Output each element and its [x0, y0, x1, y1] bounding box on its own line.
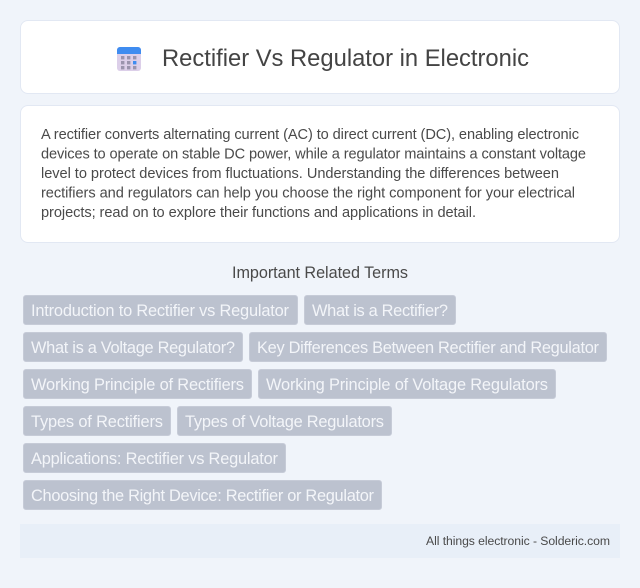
tag: [23, 332, 243, 362]
tag: Introduction to Rectifier vs Regulator: [31, 302, 290, 320]
tag: [249, 332, 607, 362]
footer text: All things electronic - Solderic.com: [426, 534, 610, 548]
tag list: [23, 295, 607, 510]
tag: [23, 295, 298, 325]
tag: Applications: Rectifier vs Regulator: [31, 450, 279, 468]
intro text panel: [20, 105, 620, 243]
tag: What is a Voltage Regulator?: [31, 339, 235, 357]
intro paragraph: projects; read on to explore their functions and applications in detail.: [41, 205, 476, 221]
tag: Choosing the Right Device: Rectifier or Regulator: [31, 487, 375, 505]
tag: [304, 295, 456, 325]
tag: [258, 369, 556, 399]
title: Rectifier Vs Regulator in Electronic: [162, 45, 529, 72]
tag: [23, 443, 286, 473]
tag: Types of Rectifiers: [31, 413, 163, 431]
tag: Working Principle of Voltage Regulators: [266, 376, 548, 394]
icon: calendar: [117, 47, 141, 71]
tag: [23, 406, 171, 436]
tag: Working Principle of Rectifiers: [31, 376, 244, 394]
tag: Key Differences Between Rectifier and Regulator: [257, 339, 600, 357]
tag: [23, 480, 382, 510]
tag: [177, 406, 392, 436]
tag: Types of Voltage Regulators: [185, 413, 384, 431]
tag: [23, 369, 252, 399]
intro paragraph: rectifiers and regulators can help you choose the right component for your electrical: [41, 186, 575, 202]
footer bar: [20, 524, 620, 558]
intro paragraph: [41, 127, 586, 221]
tag: What is a Rectifier?: [312, 302, 448, 320]
intro paragraph: level to protect devices from fluctuations. Understanding the differences between: [41, 166, 559, 182]
header panel: [20, 20, 620, 94]
intro paragraph: A rectifier converts alternating current (AC) to direct current (DC), enabling electronic: [41, 127, 579, 143]
intro paragraph: devices to operate on stable DC power, while a regulator maintains a constant voltage: [41, 146, 586, 162]
heading: related terms: Important Related Terms: [232, 264, 408, 282]
